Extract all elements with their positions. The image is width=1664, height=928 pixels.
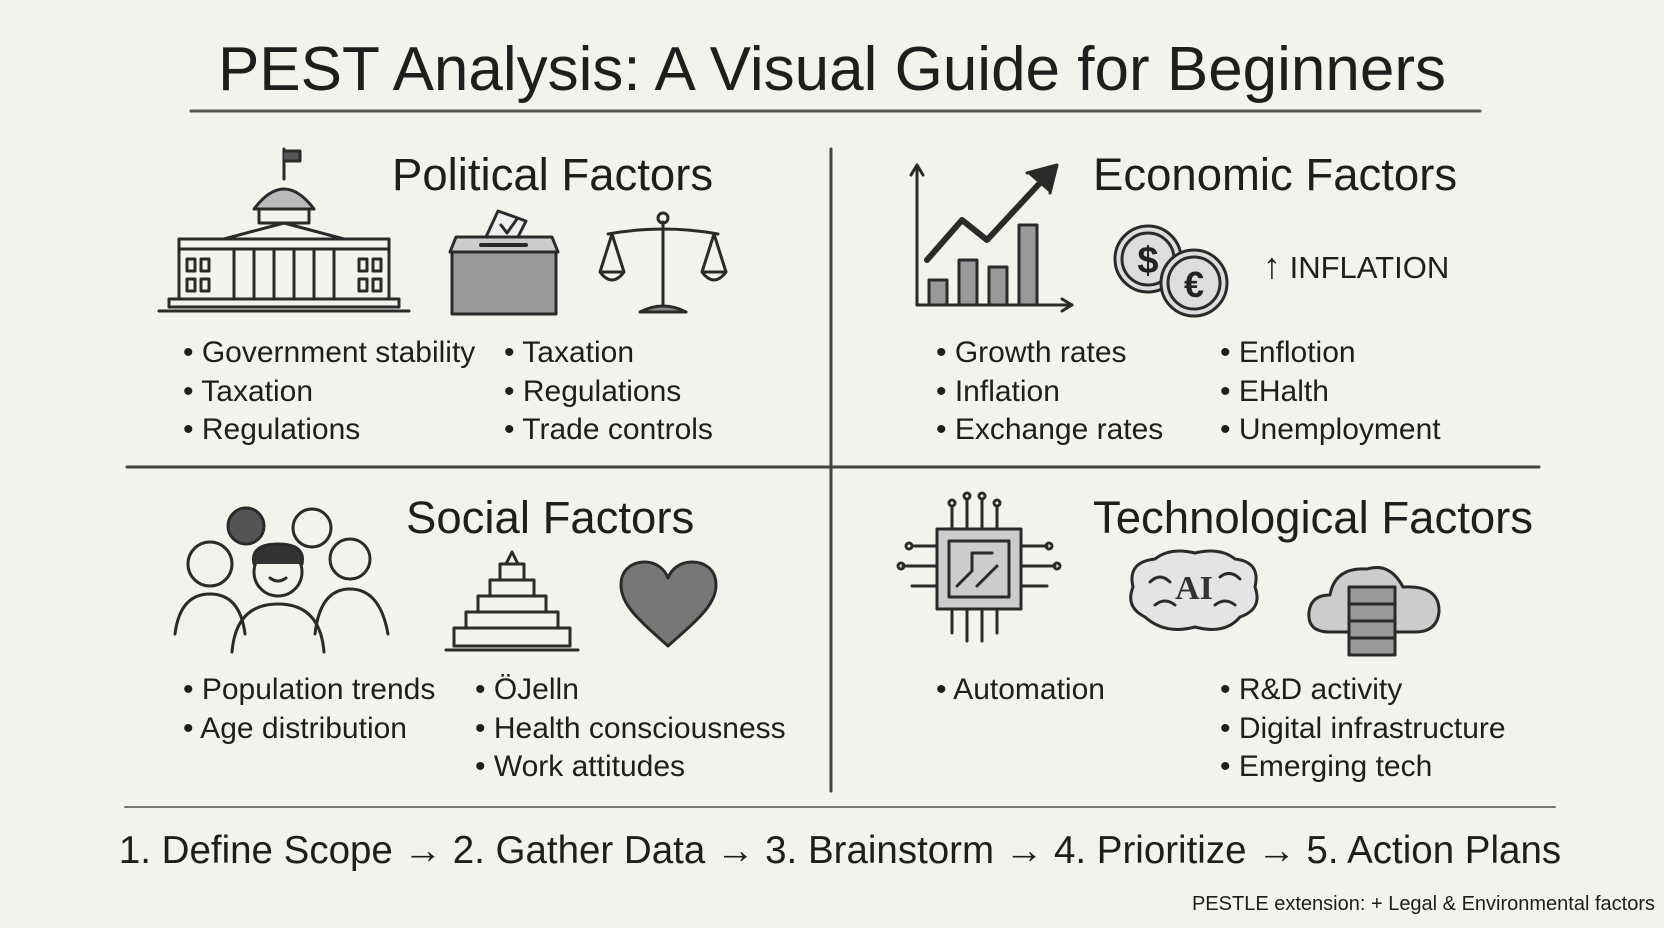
text: • ÖJelln [475, 673, 579, 706]
bullets: political: • Regulations [183, 413, 360, 446]
text: • Digital infrastructure [1220, 712, 1506, 744]
text: • Taxation [504, 336, 634, 369]
text: • Work attitudes [475, 750, 685, 783]
icon: AI brain [1129, 550, 1259, 631]
icon: growth chart [909, 163, 1074, 313]
icon: heart [620, 560, 718, 648]
bullets: political: • Government stability [183, 336, 475, 369]
icon: pyramid [444, 550, 580, 652]
footnote: PESTLE extension: + Legal & Environmental factors [1192, 893, 1655, 915]
icon: capitol building [158, 148, 410, 312]
bullets: economic: • Growth rates [936, 336, 1127, 369]
heading: technological: Technological Factors [1093, 492, 1533, 543]
text: • Unemployment [1220, 413, 1441, 446]
text: • Emerging tech [1220, 750, 1432, 783]
heading: economic: Economic Factors [1093, 149, 1457, 200]
bullets: economic [936, 336, 1163, 446]
bullets: social: • Population trends [183, 673, 435, 706]
bullets: economic: • Inflation [936, 374, 1060, 408]
icon: coins [1114, 224, 1228, 318]
icon: coins: $ [1137, 240, 1159, 282]
text: • R&D activity [1220, 673, 1402, 706]
icon: AI brain: AI [1175, 570, 1213, 607]
icon: inflation arrow: ↑ INFLATION [1263, 245, 1449, 286]
icon: cloud server [1307, 566, 1441, 656]
icon: coins: € [1184, 264, 1204, 305]
text: • Regulations [504, 374, 681, 408]
icon: chip [896, 492, 1062, 642]
heading: political: Political Factors [392, 149, 713, 200]
text: • EHalth [1220, 374, 1329, 408]
heading: social: Social Factors [406, 492, 694, 543]
bullets: social [183, 673, 435, 744]
text: • Health consciousness [475, 712, 786, 744]
bullets: political: • Taxation [183, 374, 313, 408]
bullets: political [183, 336, 476, 446]
icon: people group [174, 506, 390, 654]
title: PEST Analysis: A Visual Guide for Beginners [218, 35, 1446, 104]
text: • Trade controls [504, 413, 713, 446]
bullets: social: • Age distribution [183, 712, 407, 744]
process steps: 1. Define Scope → 2. Gather Data → 3. Brainstorm → 4. Prioritize → 5. Action Plans [119, 829, 1561, 872]
icon: scales [598, 212, 728, 314]
bullets: economic: • Exchange rates [936, 413, 1163, 446]
bullets: technological: • Automation [936, 673, 1105, 706]
text: • Enflotion [1220, 336, 1356, 369]
icon: ballot box [448, 210, 560, 316]
